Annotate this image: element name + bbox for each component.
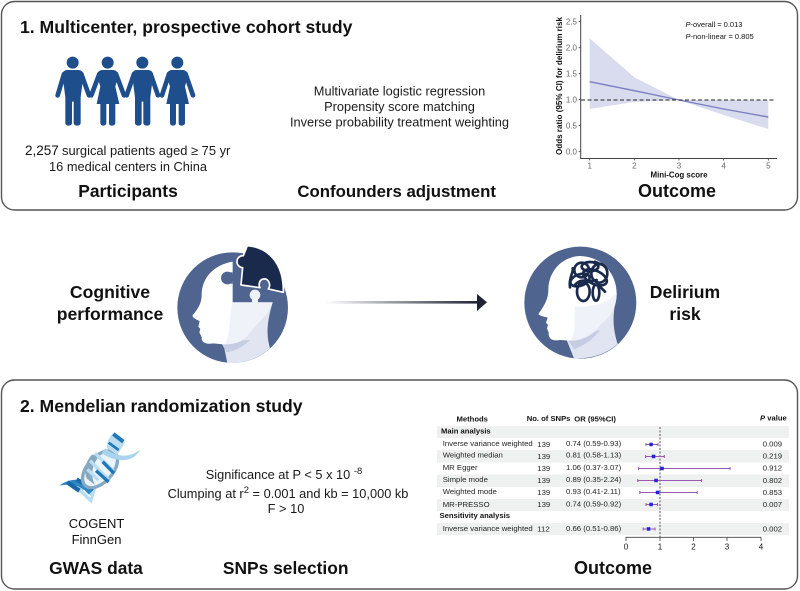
text: confounders methods: Multivariate logistic regression [314,84,485,98]
chart: forest plot: Weighted mode [443,487,497,496]
chart: odds ratio spline: 1.0 [566,96,578,104]
chart: forest plot: Inverse variance weighted [443,524,533,533]
chart: odds ratio spline: 4 [721,162,726,170]
chart: forest plot: 0.81 (0.58-1.13) [566,450,622,460]
chart: forest plot: 139 [537,440,550,449]
text: SNP criteria: F > 10 [268,501,304,516]
chart: forest plot: Main analysis [441,426,491,436]
text: participants description: 2,257 [25,143,59,158]
text: participants description: 16 medical centers in China [49,159,208,174]
chart: odds ratio spline: 2.5 [566,18,578,26]
chart: odds ratio spline: 0.5 [566,122,578,130]
chart: forest plot: 0.74 (0.59-0.92) [566,500,622,508]
label: delirium risk: risk [669,304,701,324]
label: participants: Participants [78,181,178,201]
icon: participants [58,57,193,126]
text: GWAS sources: FinnGen [72,532,121,547]
chart: forest plot: 139 [537,464,550,473]
arrow: cognition to delirium [325,294,487,311]
chart: forest plot: 139 [537,476,550,485]
chart: forest plot: 1.06 (0.37-3.07) [566,463,622,472]
panel: mendelian randomization study [2,380,798,589]
chart: forest plot: 0.002 [763,524,782,534]
chart: forest plot: 0.219 [763,452,782,460]
chart: odds ratio spline: P-non-linear = 0.805 [686,32,754,41]
text: SNP criteria [168,466,408,516]
chart: forest plot: 2 [691,542,696,552]
chart: odds ratio spline: 1.5 [566,70,578,78]
chart: odds ratio spline: P-overall = 0.013 [686,20,742,29]
text: participants description: surgical patients aged ≥ 75 yr [62,143,231,158]
chart: odds ratio spline [555,15,777,180]
chart: forest plot: P value [760,414,787,422]
text: confounders methods: Propensity score matching [324,99,475,114]
icon: head with puzzle [177,246,288,363]
chart: forest plot: 4 [759,542,764,552]
chart: forest plot [437,414,789,552]
label: SNPs selection: SNPs selection [223,558,349,578]
chart: forest plot: 139 [537,452,550,461]
label: cognitive performance: performance [57,304,164,324]
chart: forest plot: 139 [537,500,550,509]
chart: odds ratio spline: 5 [766,162,771,170]
heading: cohort study: 1. Multicenter, prospective cohort study [20,17,353,37]
label: cognitive performance [57,282,164,324]
label: confounders adjustment: Confounders adjustment [297,182,496,201]
chart: odds ratio spline: Odds ratio (95% CI) for delirium risk [555,16,564,155]
text: SNP criteria: -8 [354,466,362,477]
chart: odds ratio spline: 0.0 [566,148,578,156]
chart: forest plot: 0.66 (0.51-0.86) [566,524,622,533]
chart: forest plot: 139 [537,488,550,497]
chart: odds ratio spline: 2 [632,162,637,170]
chart: forest plot: Inverse variance weighted [443,439,533,448]
text: GWAS sources: COGENT [69,516,124,531]
chart: forest plot: Methods [456,414,488,424]
text: SNP criteria: = 0.001 and kb = 10,000 kb [249,486,408,501]
label: delirium risk: Delirium [650,282,720,302]
text: confounders methods [290,84,509,130]
chart: odds ratio spline: 1 [587,162,592,170]
chart: forest plot: 0.853 [763,488,782,497]
label: delirium risk [650,282,720,324]
chart: forest plot: OR (95%CI) [574,414,616,424]
chart: forest plot: MR-PRESSO [443,500,490,509]
panel: cohort study [2,2,798,210]
chart: forest plot: Sensitivity analysis [440,511,510,520]
label: MR outcome: Outcome [574,558,652,578]
chart: forest plot: 0 [624,542,629,552]
chart: odds ratio spline: 2.0 [566,44,578,52]
chart: forest plot: Weighted median [443,450,503,460]
text: GWAS sources [69,516,124,547]
label: outcome: Outcome [638,181,716,201]
chart: forest plot: 0.74 (0.59-0.93) [566,439,622,448]
heading: mendelian randomization: 2. Mendelian randomization study [20,396,303,416]
chart: forest plot: 0.93 (0.41-2.11) [566,487,621,496]
text: SNP criteria: Significance at P < 5 x 10 [206,467,350,482]
chart: forest plot: 0.009 [763,440,782,448]
chart: odds ratio spline: 3 [677,162,682,170]
text: SNP criteria: Clumping at r [168,486,244,501]
text: confounders methods: Inverse probability treatment weighting [290,114,509,130]
chart: forest plot: 1 [658,542,663,552]
text: SNP criteria: 2 [244,485,249,496]
chart: forest plot: No. of SNPs [527,414,570,423]
icon: head with tangled brain [524,247,636,359]
icon: DNA helix [59,433,140,503]
chart: forest plot: Simple mode [443,475,488,484]
text: participants description [25,143,231,174]
chart: forest plot: 0.802 [763,476,782,485]
chart: forest plot: 112 [537,524,550,534]
chart: odds ratio spline: Mini-Cog score [650,170,708,180]
chart: forest plot: 3 [725,542,730,552]
label: cognitive performance: Cognitive [70,282,150,302]
chart: forest plot: MR Egger [443,463,478,472]
chart: forest plot: 0.89 (0.35-2.24) [566,475,622,484]
chart: forest plot: 0.912 [763,464,782,472]
chart: forest plot: 0.007 [763,500,782,509]
label: GWAS data: GWAS data [49,558,143,578]
